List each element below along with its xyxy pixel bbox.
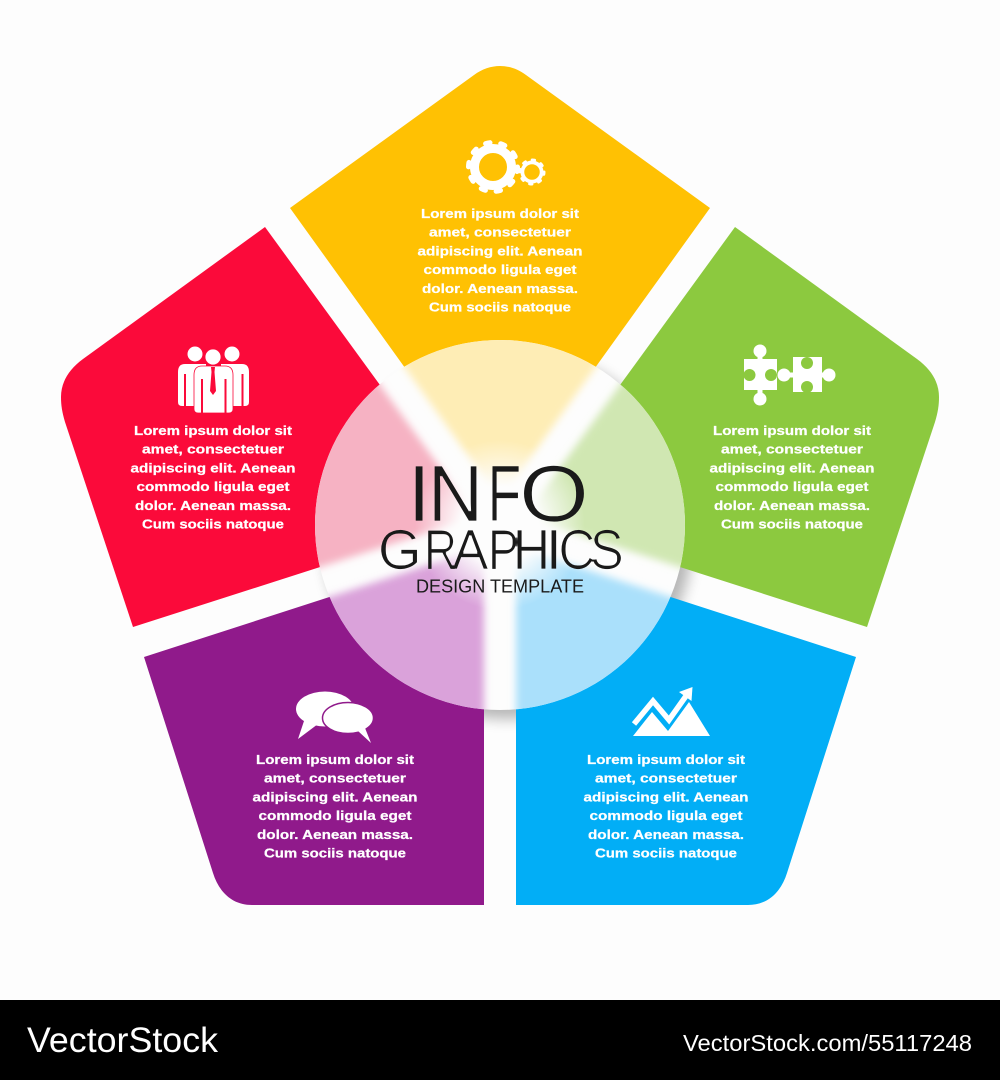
title line: INFO and GRAPHICS: S [590,518,624,581]
footer bar [0,1000,1000,1080]
text block: yellow: commodo ligula eget [424,263,577,277]
title line: INFO and GRAPHICS: I [408,449,430,538]
frosted centre circle [315,340,685,710]
panel: blue chart [516,547,856,905]
icon: speech bubbles [296,692,374,743]
panel: purple chat [144,547,484,905]
title line: INFO and GRAPHICS: O [520,449,588,538]
text block: green: Lorem ipsum dolor sit [713,424,872,438]
text block: green: Cum sociis natoque [721,518,863,532]
panel: red people [61,227,476,627]
icon: puzzle pieces [744,344,836,406]
title line: INFO and GRAPHICS [378,449,624,581]
text block: blue: adipiscing elit. Aenean [584,790,748,804]
text block: green: commodo ligula eget [716,480,869,494]
title line: INFO and GRAPHICS: F [487,449,521,538]
red pentagon segment [61,227,476,627]
text block: red: dolor. Aenean massa. [135,499,291,513]
blue pentagon segment [516,547,856,905]
text block: green: adipiscing elit. Aenean [710,461,874,475]
purple pentagon segment [144,547,484,905]
text block: purple: Lorem ipsum dolor sit [256,753,415,767]
title line: INFO and GRAPHICS: P [488,518,519,581]
panel: yellow gears [290,66,710,500]
text block: yellow: Lorem ipsum dolor sit [421,207,580,221]
yellow pentagon segment [290,66,710,500]
footer image id: VectorStock.com/55117248 [683,1030,972,1056]
green pentagon segment [524,227,939,627]
text block: purple [252,753,418,860]
text block: blue: amet, consectetuer [595,772,737,786]
text block: purple: dolor. Aenean massa. [257,828,413,842]
title line: INFO and GRAPHICS: N [428,449,483,538]
text block: purple: adipiscing elit. Aenean [252,790,418,804]
text block: blue: dolor. Aenean massa. [588,828,744,842]
text block: green [710,424,874,532]
text block: red: adipiscing elit. Aenean [130,461,296,475]
text block: blue: Cum sociis natoque [595,846,737,860]
subtitle: DESIGN TEMPLATE [416,576,584,596]
text block: purple: Cum sociis natoque [264,846,406,860]
text block: red: Lorem ipsum dolor sit [134,424,293,438]
title line: INFO and GRAPHICS: H [513,518,550,581]
text block: yellow: amet, consectetuer [429,226,571,240]
icon: growth chart [633,687,710,736]
text block: purple: amet, consectetuer [264,772,406,786]
text block: yellow [418,207,582,314]
text block: yellow: adipiscing elit. Aenean [418,244,582,258]
text block: blue: commodo ligula eget [590,809,743,823]
text block: green: amet, consectetuer [721,443,863,457]
footer logo: VectorStock [27,1021,219,1060]
title line: INFO and GRAPHICS: C [558,518,595,581]
text block: blue: Lorem ipsum dolor sit [587,753,746,767]
icon: business people [178,346,249,413]
title line: INFO and GRAPHICS: A [452,518,489,581]
text block: yellow: dolor. Aenean massa. [422,282,578,296]
title line: INFO and GRAPHICS: R [424,518,457,581]
title [378,449,624,596]
title line: INFO and GRAPHICS: G [378,518,422,581]
circle drop shadow [323,349,693,719]
text block: green: dolor. Aenean massa. [714,499,870,513]
text block: red: Cum sociis natoque [142,518,284,532]
text block: yellow: Cum sociis natoque [429,300,571,314]
text block: purple: commodo ligula eget [258,809,412,823]
panel: green puzzle [524,227,939,627]
text block: red: amet, consectetuer [142,443,284,457]
title line: INFO and GRAPHICS: I [546,518,562,581]
icon: gears [468,142,544,192]
text block: red [130,424,296,532]
text block: blue [584,753,748,860]
text block: red: commodo ligula eget [136,480,290,494]
